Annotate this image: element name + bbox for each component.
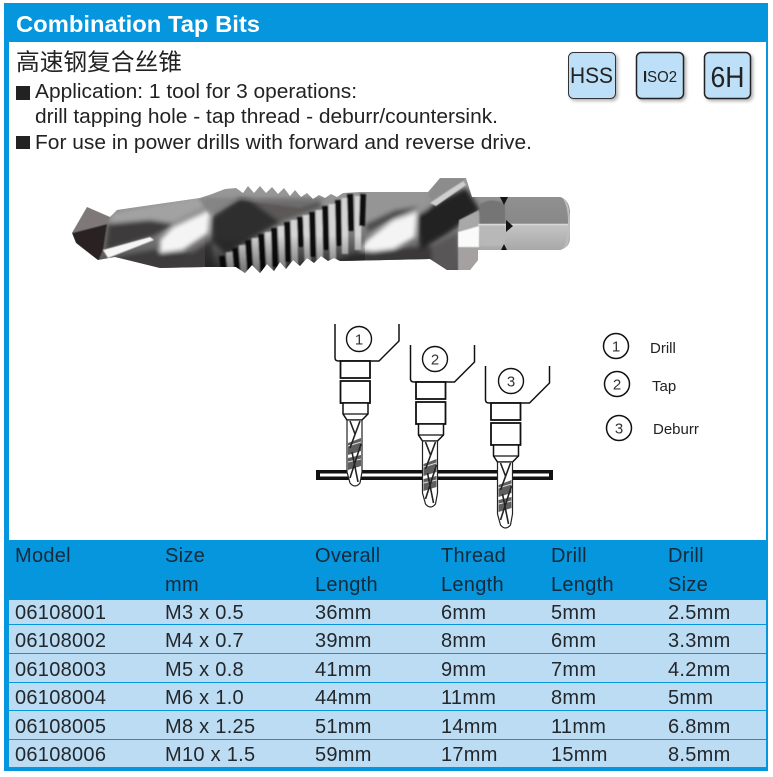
legend item: deburr: Deburr: [653, 421, 699, 438]
table row 06108006: 59mm: [315, 744, 372, 766]
legend item: drill: 1: [612, 338, 620, 356]
legend: operation key: [604, 334, 699, 440]
step 3: deburr: 3: [507, 374, 515, 390]
table row 06108004: M6 x 1.0: [165, 687, 244, 709]
table header: Overall: [315, 545, 380, 567]
table header: mm: [165, 574, 199, 596]
collar streak: [430, 181, 466, 206]
table row 06108004: [9, 683, 766, 710]
table row 06108005: 06108005: [15, 716, 106, 738]
table row 06108004: 06108004: [15, 687, 106, 709]
badge: ISO2: [636, 52, 684, 98]
rear bright band: [360, 212, 417, 253]
table row 06108001: 6mm: [441, 602, 486, 624]
front narrow bright strip: [103, 237, 154, 258]
lower rear shadow: [336, 246, 432, 264]
table row 06108004: 44mm: [315, 687, 372, 709]
table row 06108001: [9, 600, 766, 624]
front gray face: [108, 198, 202, 227]
legend item: tap: 2: [613, 376, 621, 394]
step 3: deburr: [486, 366, 550, 528]
legend item: drill: Drill: [650, 340, 676, 357]
rear dark flute: [417, 188, 480, 250]
product image: combination tap bit: [72, 178, 570, 273]
feature list: [16, 81, 532, 154]
chinese subtitle: 高速钢复合丝锥: [16, 49, 182, 75]
table row 06108001: 5mm: [551, 602, 596, 624]
table row 06108003: 06108003: [15, 659, 106, 681]
badge: HSS: [568, 52, 616, 98]
table row 06108005: 6.8mm: [668, 716, 731, 738]
table header: Size: [668, 574, 708, 596]
table row 06108002: 39mm: [315, 630, 372, 652]
table header: Thread: [441, 545, 506, 567]
table row 06108005: 14mm: [441, 716, 498, 738]
table row 06108005: [9, 711, 766, 739]
collar bright band: [458, 226, 479, 247]
badge: 6H: 6H: [710, 62, 744, 94]
table row 06108006: [9, 740, 766, 767]
bullet: power drills: [16, 136, 30, 149]
table row 06108002: 06108002: [15, 630, 106, 652]
legend item: deburr: 3: [615, 420, 623, 438]
table row 06108003: M5 x 0.8: [165, 659, 244, 681]
table row 06108004: 8mm: [551, 687, 596, 709]
legend item: tap: Tap: [652, 378, 676, 395]
table row 06108003: 4.2mm: [668, 659, 731, 681]
table header: Length: [551, 574, 614, 596]
panel: white content area: [9, 42, 766, 540]
step 2: tap: [410, 345, 474, 507]
table row 06108005: M8 x 1.25: [165, 716, 255, 738]
badge: HSS: HSS: [570, 63, 613, 88]
front flute shadow: [106, 220, 175, 250]
legend item: deburr: [606, 416, 699, 440]
table header: Model: [15, 545, 71, 567]
title: Combination Tap Bits: [16, 11, 260, 37]
table row 06108005: 11mm: [551, 716, 606, 738]
table row 06108002: 8mm: [441, 630, 486, 652]
tip lower dark: [72, 224, 107, 261]
table row 06108003: 9mm: [441, 659, 486, 681]
legend item: drill: [604, 334, 676, 358]
workpiece plate: [316, 470, 553, 480]
top tooth shading: [198, 198, 330, 215]
table row 06108001: 06108001: [15, 602, 106, 624]
thread lower falloff: [205, 238, 365, 273]
table row 06108002: [9, 625, 766, 653]
central dark flute: [210, 195, 282, 254]
table row 06108001: 2.5mm: [668, 602, 731, 624]
tip upper: [72, 207, 110, 233]
table header: Length: [315, 574, 378, 596]
table row 06108006: 17mm: [441, 744, 498, 766]
table row 06108002: M4 x 0.7: [165, 630, 244, 652]
collar lower: [434, 232, 458, 270]
table header: Size: [165, 545, 205, 567]
text: power drills: For use in power drills with forward and reverse drive.: [35, 132, 532, 154]
text: operations: drill tapping hole - tap thread - deburr/countersink.: [35, 106, 498, 128]
front bright blob: [160, 210, 210, 253]
hex markers: [500, 197, 513, 250]
table row 06108005: 51mm: [315, 716, 372, 738]
table row 06108006: 8.5mm: [668, 744, 731, 766]
hex chamfers: [480, 200, 505, 224]
table row 06108002: 3.3mm: [668, 630, 731, 652]
table row 06108002: 6mm: [551, 630, 596, 652]
table header: Drill: [668, 545, 704, 567]
badge: ISO2: ISO2: [643, 69, 677, 86]
step 1: drill: [335, 324, 399, 486]
table row 06108004: 5mm: [668, 687, 713, 709]
rear gray shank: [366, 204, 432, 226]
diagram: drill operation steps: [316, 324, 553, 528]
table row 06108006: 06108006: [15, 744, 106, 766]
table row 06108001: 36mm: [315, 602, 372, 624]
step 2: tap: 2: [431, 352, 439, 368]
legend item: tap: [604, 372, 676, 396]
table header: Drill: [551, 545, 587, 567]
specification table: [9, 545, 766, 767]
step 1: drill: 1: [355, 332, 363, 348]
table header: Length: [441, 574, 504, 596]
table row 06108006: M10 x 1.5: [165, 744, 255, 766]
table row 06108001: M3 x 0.5: [165, 602, 244, 624]
table row 06108003: 41mm: [315, 659, 372, 681]
table header: [15, 545, 708, 596]
badge: 6H: [704, 52, 750, 98]
text: application: Application: 1 tool for 3 operations:: [35, 81, 357, 103]
table row 06108006: 15mm: [551, 744, 608, 766]
table row 06108003: 7mm: [551, 659, 596, 681]
table row 06108004: 11mm: [441, 687, 496, 709]
bullet: application: [16, 86, 30, 100]
hex shank: [472, 197, 572, 250]
thread stripes: [222, 194, 363, 276]
table row 06108003: [9, 654, 766, 682]
